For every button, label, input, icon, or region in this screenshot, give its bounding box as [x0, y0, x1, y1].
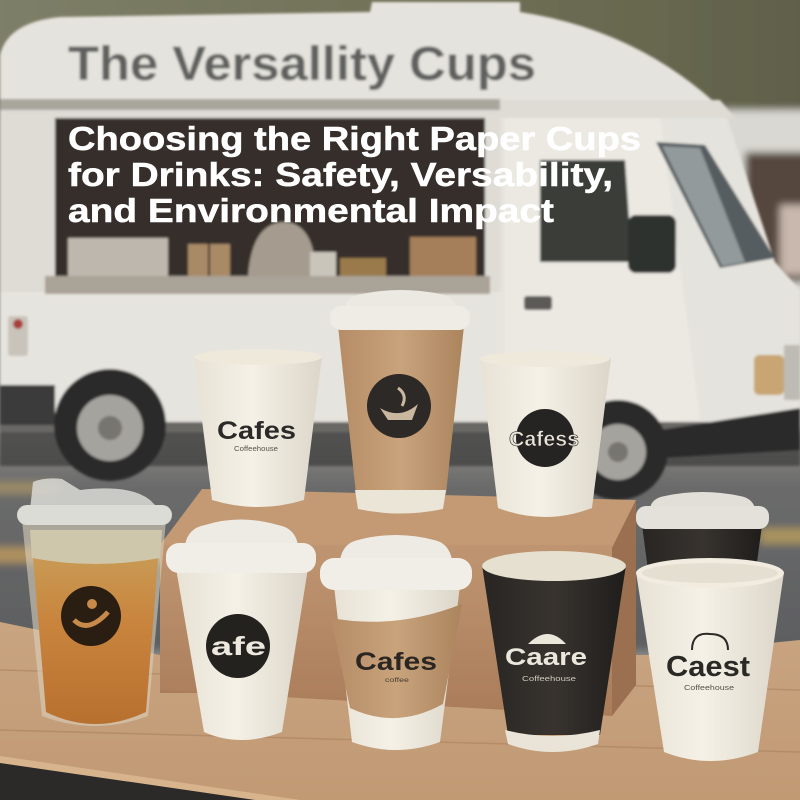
lid: [345, 290, 456, 308]
cup label: Cafes: [217, 417, 296, 445]
food truck: [0, 2, 800, 500]
cup: clear iced tea: [17, 478, 172, 726]
counter: [45, 276, 490, 294]
truck lettering: The Versallity Cups: [68, 38, 536, 91]
cup: front centre with kraft sleeve: [320, 535, 472, 750]
cup: white right back: [480, 351, 611, 517]
cup label: Caest: [666, 651, 750, 683]
title: Choosing the Right Paper Cups: [68, 120, 641, 157]
cab side window: [540, 160, 632, 262]
headlight: [754, 355, 784, 395]
under-body shadow: [0, 422, 800, 466]
cup: white front left with lid: [166, 520, 316, 740]
cup: white front right: Coffeehouse: [684, 685, 734, 692]
cup: white left back: [194, 349, 322, 507]
cup: white front right: [636, 558, 784, 761]
awning: [0, 99, 500, 110]
logo: [367, 374, 431, 438]
cup label: afe: [211, 631, 266, 661]
door mirror: [628, 215, 676, 273]
cup: black back right with lid: [636, 492, 769, 570]
tail light: [8, 316, 28, 356]
cup: white left back: Coffeehouse: [234, 446, 278, 453]
lid: [30, 478, 160, 510]
front wheel: [568, 400, 668, 500]
service window: [55, 118, 485, 283]
cup label: Caare: [505, 644, 587, 671]
lower trim: [0, 385, 55, 425]
windshield: [656, 142, 775, 268]
cup: black front: Coffeehouse: [522, 676, 576, 683]
truck body: [0, 2, 800, 432]
cardboard box: [160, 489, 636, 716]
cup: black front: [482, 551, 626, 752]
cup: kraft with lid, back centre: [330, 290, 470, 514]
cup label: Cafess: [509, 428, 579, 451]
table: [0, 622, 800, 800]
title: and Environmental Impact: [68, 192, 554, 229]
cup: front centre with kraft sleeve: coffee: [385, 678, 410, 684]
title: for Drinks: Safety, Versability,: [68, 156, 613, 193]
rear wheel: [54, 369, 166, 481]
door handle: [524, 296, 552, 310]
cup label: Cafes: [355, 648, 437, 676]
